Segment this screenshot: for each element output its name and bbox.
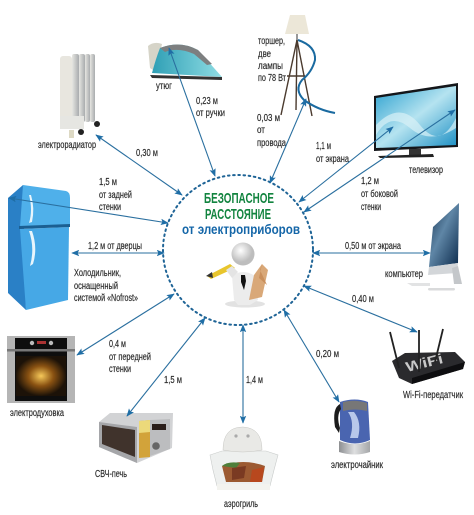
label: lamp distance: провода	[257, 138, 286, 149]
label: kettle distance: 0,20 м	[316, 349, 339, 360]
title: РАССТОЯНИЕ	[205, 206, 271, 223]
label: lamp: лампы	[258, 61, 283, 72]
icon: floor lamp	[281, 15, 335, 116]
label: kettle: электрочайник	[331, 460, 383, 471]
label: lamp: по 78 Вт	[258, 73, 286, 84]
label: fridge back distance: стенки	[99, 202, 121, 213]
icon: wi-fi router	[390, 329, 465, 384]
icon: iron	[148, 43, 222, 80]
label: fridge: Холодильник,	[74, 268, 121, 279]
icon: microwave	[99, 413, 173, 463]
label: radiator distance: 0,30 м	[136, 148, 158, 159]
label: lamp: две	[258, 49, 271, 60]
label: lamp distance: 0,03 м	[257, 113, 280, 124]
label: fridge door distance: 1,2 м от дверцы	[88, 241, 142, 252]
label: air fryer distance: 1,4 м	[246, 375, 263, 386]
label: television: телевизор	[409, 165, 443, 176]
icon: air fryer	[210, 427, 278, 490]
label: iron distance: от ручки	[196, 108, 225, 119]
label: oven distance	[109, 339, 151, 375]
icon: computer	[407, 203, 462, 290]
label: fridge back distance: 1,5 м	[99, 177, 117, 188]
label: tv screen distance	[316, 141, 349, 165]
title	[182, 190, 300, 237]
label: tv screen distance: 1,1 м	[316, 141, 331, 152]
label: microwave distance: 1,5 м	[164, 375, 182, 386]
title: от электроприборов	[182, 222, 300, 237]
label: computer distance: 0,50 м от экрана	[345, 241, 401, 252]
label: oven distance: 0,4 м	[109, 339, 126, 350]
label: fridge	[74, 268, 138, 304]
label: wi-fi distance: 0,40 м	[352, 294, 374, 305]
icon: wi-fi router: WiFi	[404, 350, 445, 375]
label: tv side distance: 1,2 м	[361, 176, 379, 187]
label: lamp: торшер,	[258, 36, 285, 47]
label: lamp distance: от	[257, 125, 265, 136]
label: iron: утюг	[156, 81, 172, 92]
label: fridge: системой «Nofrost»	[74, 293, 138, 304]
label: iron distance: 0,23 м	[196, 96, 218, 107]
label: oven: электродуховка	[10, 408, 64, 419]
label: computer: компьютер	[385, 269, 423, 280]
label: tv screen distance: от экрана	[316, 154, 349, 165]
dotted safety circle	[163, 175, 313, 325]
icon: person with pencil and ruler	[206, 242, 268, 308]
label: radiator: электрорадиатор	[38, 140, 96, 151]
label: fridge back distance	[99, 177, 132, 213]
icon: radiator	[60, 54, 100, 138]
icon: refrigerator	[8, 185, 70, 310]
label: fridge: оснащенный	[74, 281, 118, 292]
label: lamp	[258, 36, 286, 84]
label: lamp distance	[257, 113, 286, 149]
arrows	[9, 48, 455, 423]
title: БЕЗОПАСНОЕ	[204, 190, 274, 207]
label: microwave: СВЧ-печь	[95, 469, 127, 480]
label: oven distance: от передней	[109, 352, 151, 363]
label: tv side distance: от боковой	[361, 188, 398, 200]
label: oven distance: стенки	[109, 364, 131, 375]
icon: television	[374, 83, 458, 158]
label: tv side distance: стенки	[361, 202, 381, 213]
icon: electric kettle	[334, 400, 370, 454]
label: air fryer: аэрогриль	[224, 499, 258, 510]
label: fridge back distance: от задней	[99, 190, 132, 201]
icon: oven	[7, 336, 75, 403]
label: iron distance	[196, 96, 225, 119]
label: tv side distance	[361, 176, 398, 213]
